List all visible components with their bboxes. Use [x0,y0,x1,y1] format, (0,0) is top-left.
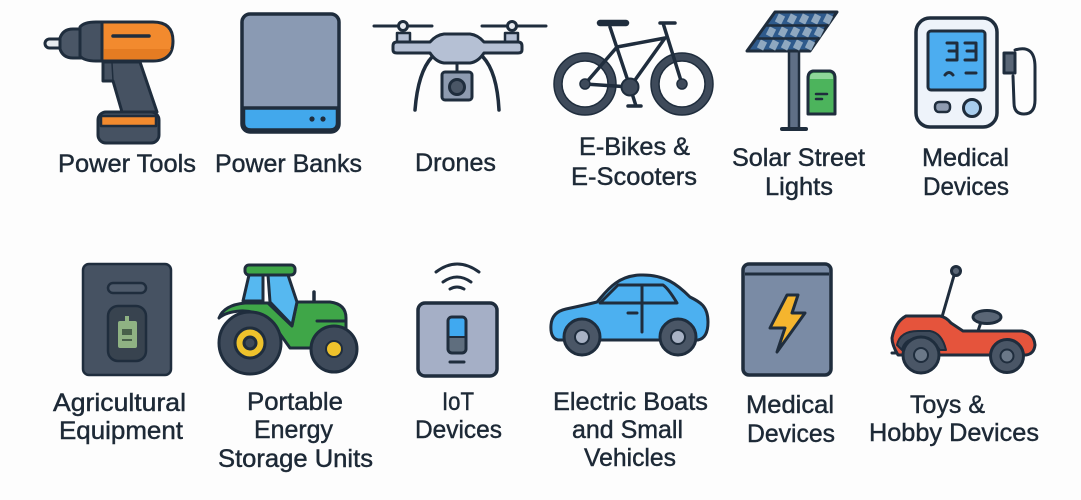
label: Toys & [910,391,985,419]
label: Drones [415,149,496,177]
label: Portable [247,388,343,416]
label [746,391,835,448]
label: Power Tools [58,150,196,178]
item: agricultural equipment [53,264,186,445]
icon: tractor [219,265,357,374]
item: e-bikes and e-scooters [554,23,713,191]
label: Energy [254,416,333,444]
item: drones [374,22,546,177]
label: Agricultural [53,389,186,417]
label: Devices [415,416,502,444]
label: Electric Boats [553,388,708,416]
label: Storage Units [218,445,373,473]
item: toys and hobby devices [869,266,1039,447]
item: power tools [45,22,196,178]
label: Devices [747,420,835,448]
label: IoT [442,388,474,416]
label [869,391,1039,447]
label: and Small [572,416,683,444]
label: Medical [922,144,1009,172]
label: Power Banks [215,150,362,178]
item: power banks [215,14,362,178]
icon: toy buggy [892,266,1035,373]
label: E-Scooters [571,163,697,191]
icon: drone [374,22,546,110]
label: Lights [765,173,833,201]
icon: battery block with lightning bolt [743,264,831,375]
label: Hobby Devices [869,419,1039,447]
label: Devices [923,173,1009,201]
icon: car [551,275,708,355]
label [732,144,865,201]
label: Medical [746,391,834,419]
label: Solar Street [732,144,865,172]
label [553,388,708,472]
icon: cordless drill [45,22,173,143]
icon: wifi switch [418,264,497,376]
label: Equipment [59,417,183,445]
icon: bicycle [554,23,713,115]
label: Vehicles [584,444,676,472]
item: iot devices [415,264,502,444]
item: portable energy storage units [218,265,373,473]
label [571,133,697,191]
item: medical devices (bottom) [743,264,835,448]
label [922,144,1009,201]
icon: battery cabinet [83,264,171,375]
icon: handheld monitor [916,18,1035,127]
label [218,388,373,473]
item: medical devices (top) [916,18,1035,201]
icon: power bank [242,14,339,132]
item: solar street lights [732,12,865,201]
label [415,388,502,444]
label [53,389,186,445]
item: electric boats and small vehicles [551,275,708,472]
icon: solar panel on pole with battery [747,12,837,129]
label: E-Bikes & [579,133,690,161]
